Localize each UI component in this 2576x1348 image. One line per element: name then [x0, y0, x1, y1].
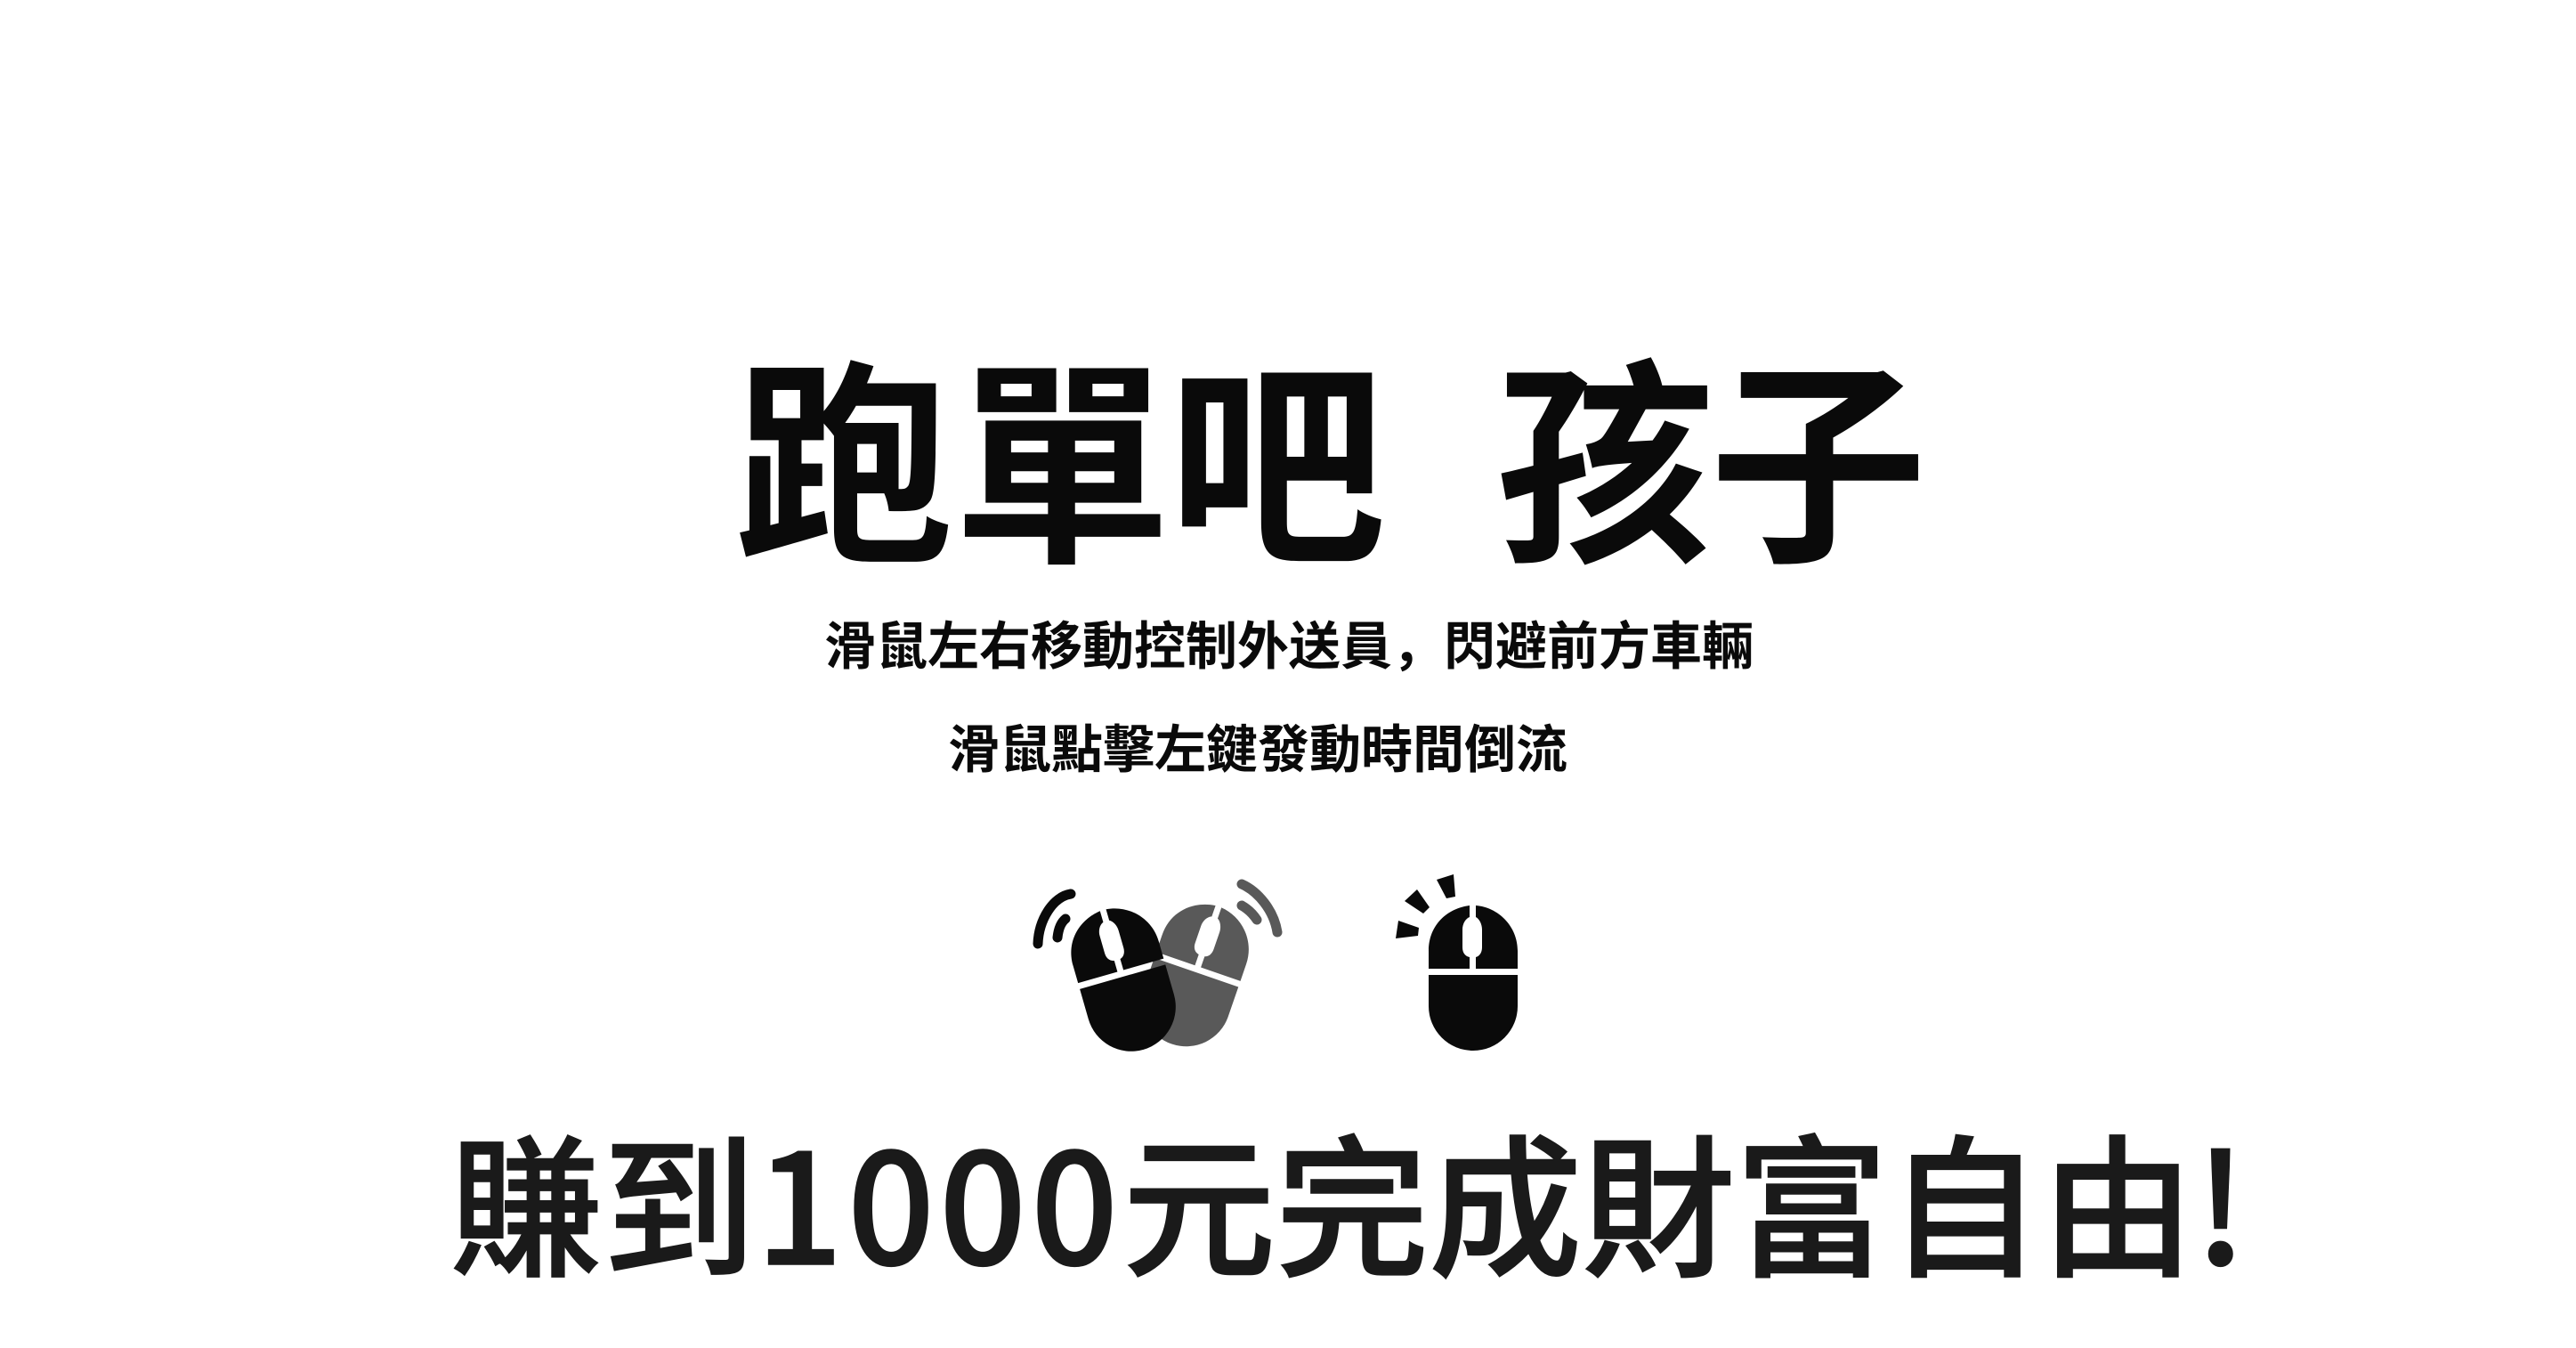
closing slogan: 賺到1000元完成財富自由! [450, 1086, 2247, 1309]
icon: black mouse tilted left [1038, 894, 1187, 1062]
title: 跑單吧 孩子 [735, 292, 1927, 608]
icon: grey mouse tilted right [1130, 884, 1277, 1059]
instruction line: click: 滑鼠點擊左鍵發動時間倒流 [948, 708, 1567, 783]
instruction line: move: 滑鼠左右移動控制外送員，閃避前方車輛 [824, 605, 1754, 679]
